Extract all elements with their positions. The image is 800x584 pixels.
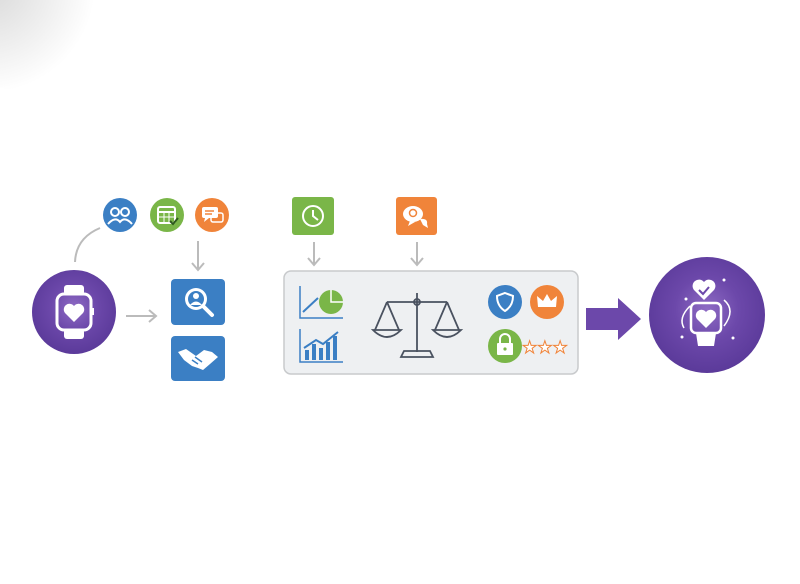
icon: chat circle	[195, 198, 229, 232]
panel: evaluation	[284, 271, 578, 374]
connector curve	[75, 228, 100, 262]
icon: handshake square	[171, 336, 225, 381]
arrow: down to search	[192, 241, 204, 270]
icon: wellbeing circle	[649, 257, 765, 373]
icon: calendar circle	[150, 198, 184, 232]
chart: bar chart	[300, 329, 343, 362]
icon: people circle	[103, 198, 137, 232]
icon: rating stars: ★★★	[522, 338, 568, 358]
icon: lock circle	[488, 329, 522, 363]
icon: shield circle	[488, 285, 522, 319]
arrow: watch to search	[126, 310, 156, 322]
chart: line with pie	[300, 286, 343, 318]
icon: search profile square	[171, 279, 225, 325]
icon: balance scale	[373, 293, 461, 357]
icon: idea chat square	[396, 197, 437, 235]
arrows: down to panel	[308, 242, 423, 265]
icon: clock square	[292, 197, 334, 235]
icon: smartwatch circle	[32, 270, 116, 354]
corner shading	[0, 0, 100, 90]
arrow: purple	[586, 298, 641, 340]
icon: crown circle	[530, 285, 564, 319]
